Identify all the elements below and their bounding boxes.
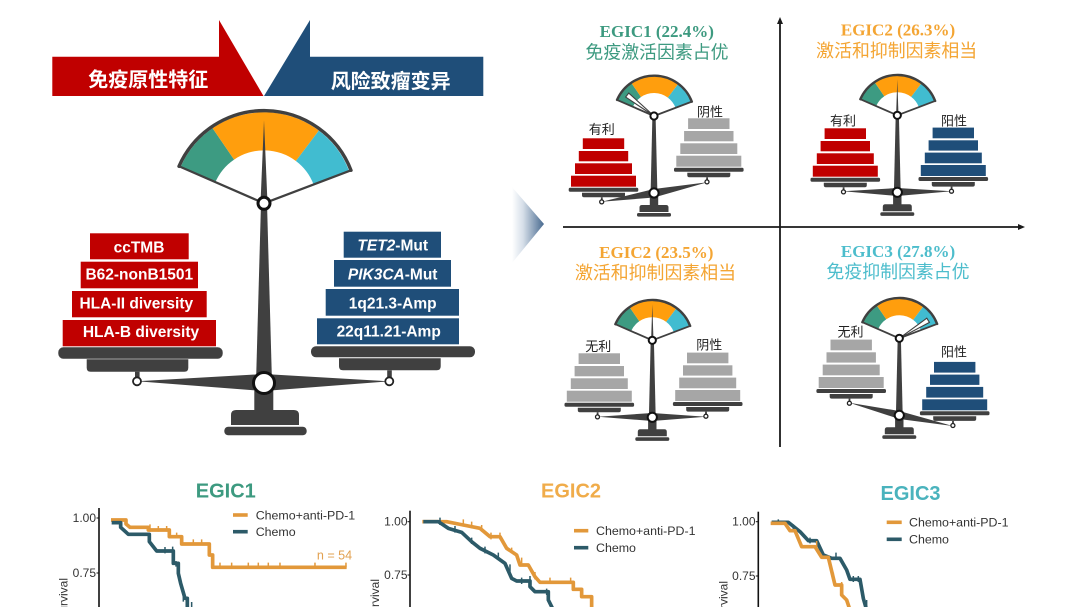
title: EGIC2: EGIC2 (26.3%) (841, 20, 955, 40)
header: risk oncogenic mutation banner: 风险致瘤变异 (331, 69, 451, 93)
legend: Chemo+anti-PD-1 (596, 524, 696, 538)
beam (843, 188, 952, 196)
beam (849, 403, 953, 426)
quadrant: EGIC3 27.8% (816, 242, 990, 439)
right pan: oncogenic mutations: TET2-Mut (357, 237, 428, 254)
left pan: favourable immune features: HLA-B diversity (83, 324, 200, 341)
title: EGIC2: 激活和抑制因素相当 (816, 41, 977, 61)
title: EGIC2 (575, 243, 736, 283)
survival chart: EGIC3 (716, 483, 1009, 607)
legend (574, 524, 696, 555)
right pan: oncogenic mutations: PIK3CA-Mut (348, 266, 437, 283)
curves (111, 520, 347, 607)
arrow: to quadrant plot (512, 187, 544, 263)
legend (887, 516, 1009, 547)
right pan: oncogenic mutations: 1q21.3-Amp (349, 295, 437, 312)
right pan: oncogenic mutations (311, 232, 475, 385)
title: EGIC3: 免疫抑制因素占优 (826, 262, 970, 282)
survival chart: EGIC1 (56, 480, 355, 607)
label: negative: 阴性 (696, 338, 722, 352)
axis and tick labels: 0.75 (73, 566, 96, 580)
label: favourable: 有利 (589, 122, 615, 137)
right stack: positive (918, 128, 988, 193)
header: risk oncogenic mutation banner (264, 20, 483, 96)
curves (771, 519, 867, 607)
quadrant: EGIC2 26.3% (810, 20, 988, 216)
legend: Chemo+anti-PD-1 (909, 516, 1009, 530)
chart title: EGIC2 (541, 480, 601, 502)
curves (422, 518, 592, 607)
legend: Chemo (256, 525, 296, 539)
left stack: unfavourable (816, 340, 886, 405)
quadrant: EGIC2 23.5% (564, 243, 742, 441)
sample size: n = 54 (317, 549, 352, 563)
label: unfavourable: 无利 (585, 339, 611, 354)
legend: Chemo+anti-PD-1 (256, 508, 355, 522)
header: immune-intrinsic features banner (52, 20, 263, 96)
title: EGIC2 (816, 20, 977, 61)
header: immune-intrinsic features banner: 免疫原性特征 (88, 68, 208, 92)
axis and tick labels (56, 508, 99, 607)
quadrant axes (563, 17, 1025, 447)
chart title: EGIC1 (196, 480, 256, 502)
axis and tick labels: 1.00 (384, 515, 408, 529)
quadrant: EGIC1 22.4% (569, 22, 744, 217)
right stack: positive (920, 362, 990, 428)
main scale pivots (254, 197, 274, 394)
legend (233, 508, 355, 539)
label: unfavourable: 无利 (837, 324, 864, 340)
axis and tick labels: 1.00 (732, 515, 756, 529)
main balance scale (58, 111, 475, 435)
label: negative: 阴性 (697, 104, 723, 120)
legend: Chemo (596, 541, 636, 555)
title: EGIC1 (585, 22, 729, 63)
right stack: negative (674, 118, 744, 184)
title: EGIC1: EGIC1 (22.4%) (600, 22, 714, 41)
axis and tick labels: 0.75 (732, 569, 756, 583)
title: EGIC2: EGIC2 (23.5%) (599, 243, 713, 262)
survival chart: EGIC2 (368, 480, 696, 607)
title: EGIC3 (826, 242, 970, 282)
main scale pillar and base (224, 203, 307, 435)
scale stand and gauge (617, 76, 692, 217)
label: positive: 阳性 (941, 114, 967, 128)
left pan: favourable immune features (58, 233, 223, 385)
axis and tick labels: 0.75 (384, 568, 408, 582)
right pan: oncogenic mutations: 22q11.21-Amp (337, 323, 441, 340)
axis and tick labels: 1.00 (73, 511, 96, 525)
label: positive: 阳性 (941, 344, 967, 360)
label: favourable: 有利 (830, 114, 856, 128)
legend: Chemo (909, 533, 949, 547)
beam (598, 413, 706, 421)
left pan: favourable immune features: ccTMB (114, 239, 164, 256)
axis and tick labels (716, 512, 758, 607)
left pan: favourable immune features: B62-nonB1501 (85, 267, 194, 284)
main gauge (179, 111, 351, 203)
left pan: favourable immune features: HLA-II diversity (79, 295, 194, 312)
left stack: favourable (569, 138, 638, 204)
right stack: negative (673, 353, 742, 418)
title: EGIC1: 免疫激活因素占优 (585, 43, 729, 63)
main scale beam (137, 374, 389, 391)
title: EGIC2: 激活和抑制因素相当 (575, 263, 736, 283)
left stack: unfavourable (564, 353, 634, 419)
left stack: favourable (810, 128, 880, 194)
title: EGIC3: EGIC3 (27.8%) (841, 242, 955, 261)
scale stand and gauge (615, 300, 690, 441)
scale stand and gauge (862, 298, 937, 439)
scale stand and gauge (860, 75, 935, 216)
axis and tick labels (368, 511, 410, 607)
beam (602, 182, 707, 202)
chart title: EGIC3 (880, 483, 941, 505)
